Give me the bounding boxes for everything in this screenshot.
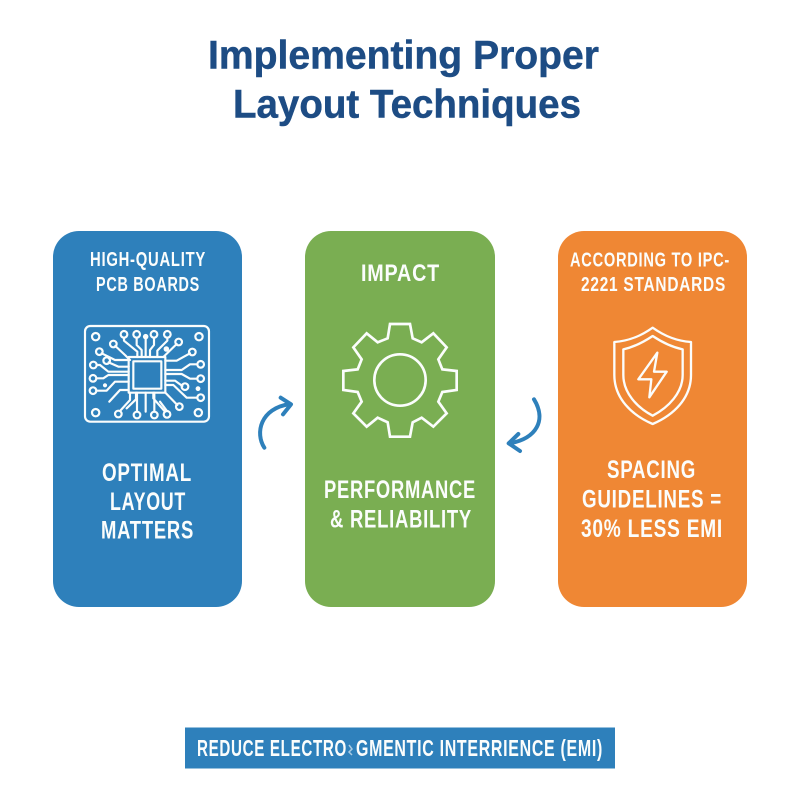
banner text: GMENTIC INTERRIENCE (EMI): [356, 735, 603, 761]
panel text: performance and reliability: PERFORMANCE: [324, 476, 476, 504]
icon: shield with lightning bolt: [614, 328, 691, 424]
panel text: optimal layout matters: MATTERS: [101, 516, 194, 544]
panel heading: IPC-2221 standards: ACCORDING TO IPC-: [570, 250, 730, 272]
banner text: [197, 735, 603, 761]
banner text: REDUCE ELECTRO: [197, 735, 347, 761]
panel heading: IPC-2221 standards: 2221 STANDARDS: [581, 274, 726, 296]
arrow: blue to green: [260, 398, 291, 448]
bottom banner: [185, 728, 615, 768]
panel heading: high-quality PCB boards: PCB BOARDS: [96, 274, 200, 296]
panel text: performance and reliability: [324, 476, 476, 534]
panel: spacing guidelines (orange): [558, 231, 747, 607]
panel text: optimal layout matters: LAYOUT: [110, 488, 186, 516]
panel: optimal layout (blue): [53, 231, 242, 607]
panel text: optimal layout matters: [101, 459, 194, 544]
panel heading: high-quality PCB boards: HIGH-QUALITY: [90, 249, 206, 271]
panel heading: impact: IMPACT: [361, 260, 440, 287]
arrow: orange to green: [509, 399, 539, 451]
title: Layout Techniques: [233, 82, 581, 126]
panel text: spacing guidelines result: SPACING: [607, 456, 696, 484]
panel text: spacing guidelines result: GUIDELINES =: [582, 486, 722, 514]
panel text: performance and reliability: & RELIABILITY: [330, 506, 472, 534]
panel: impact (green): [305, 231, 495, 607]
panel heading: high-quality PCB boards: [90, 249, 206, 296]
icon: gear: [343, 324, 457, 437]
panel text: spacing guidelines result: 30% LESS EMI: [581, 515, 723, 543]
banner glitch mark: [349, 745, 352, 755]
icon: circuit board: [85, 326, 209, 422]
title: Implementing Proper: [208, 34, 599, 78]
title: [208, 34, 599, 126]
panel text: spacing guidelines result: [581, 456, 723, 543]
panel heading: IPC-2221 standards: [570, 250, 730, 296]
panel text: optimal layout matters: OPTIMAL: [102, 459, 192, 487]
